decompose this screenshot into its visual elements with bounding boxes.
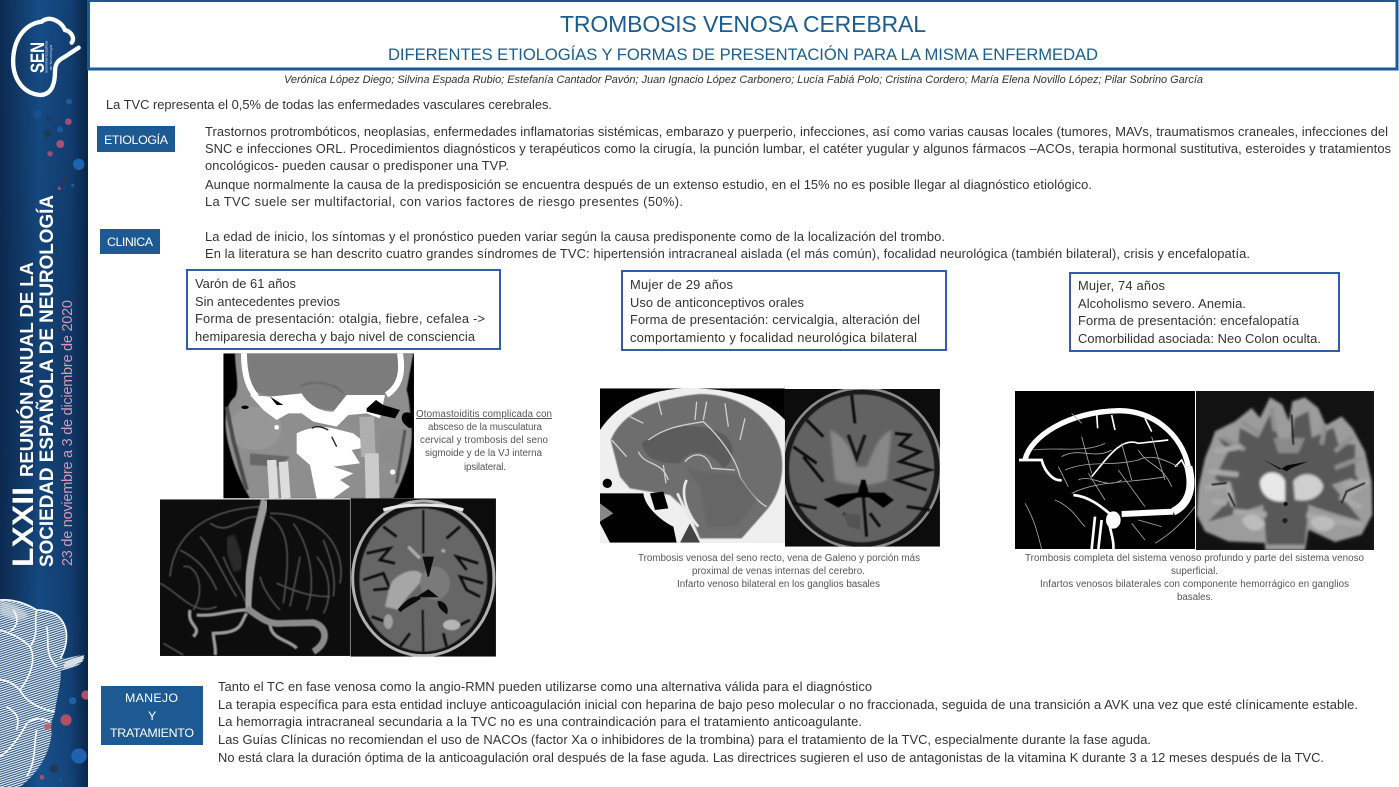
caption: case 3: superficial.	[1171, 566, 1218, 577]
case box 3: Alcoholismo severo. Anemia.	[1078, 296, 1246, 311]
authors: Verónica López Diego; Silvina Espada Rubio; Estefanía Cantador Pavón; Juan Ignacio López Carbonero; Lucía Fabiá Polo; Cristina Cordero; María Elena Novillo López; Pilar Sobrino García	[284, 74, 1203, 86]
caption: case 1	[416, 409, 552, 473]
case box 2: Forma de presentación: cervicalgia, alteración del	[630, 312, 920, 327]
caption: case 1: cervical y trombosis del seno	[420, 435, 549, 446]
text: manejo y tratamiento: La hemorragia intracraneal secundaria a la TVC no es una contraindicación para el tratamiento anticoagulante.	[218, 714, 862, 729]
image: coronal FLAIR, case 3	[1196, 391, 1374, 550]
case box 1: Varón de 61 años	[195, 276, 296, 291]
case box 3: Comorbilidad asociada: Neo Colon oculta.	[1078, 331, 1321, 346]
caption: case 3	[1025, 553, 1365, 603]
case box 1: Sin antecedentes previos	[195, 294, 340, 309]
text: clínica: En la literatura se han descrito cuatro grandes síndromes de TVC: hipertensión intracraneal aislada (el más común), focalidad neurológica (también bilateral), crisis y encefalopatía.	[205, 246, 1250, 261]
case box 3: Mujer, 74 años	[1078, 278, 1165, 293]
caption: case 2: Infarto venoso bilateral en los ganglios basales	[677, 579, 880, 590]
caption: case 3: Infartos venosos bilaterales con componente hemorrágico en ganglios	[1040, 579, 1349, 590]
caption: case 2: proximal de venas internas del cerebro.	[692, 566, 865, 577]
text: manejo y tratamiento: La terapia específica para esta entidad incluye anticoagulación inicial con heparina de bajo peso molecular o no fraccionada, seguida de una transición a AVK una vez que esté clínicamente estable.	[218, 697, 1358, 712]
label: clínica	[100, 229, 160, 254]
image: axial FLAIR, case 1	[350, 498, 496, 657]
case box 2: Uso de anticonceptivos orales	[630, 295, 804, 310]
decorative network dots, top	[33, 99, 84, 190]
caption: case 1: ipsilateral.	[464, 462, 506, 473]
label: manejo y tratamiento	[101, 686, 203, 745]
caption: case 1: sigmoide y de la VJ interna	[425, 448, 543, 459]
logo: SEN: Sociedad Española	[44, 41, 48, 73]
text: manejo y tratamiento: Las Guías Clínicas no recomiendan el uso de NACOs (factor Xa o inhibidores de la trombina) para el tratamiento de la TVC, especialmente durante la fase aguda.	[218, 732, 1151, 747]
label: etiología: ETIOLOGÍA	[104, 132, 169, 147]
caption: case 1: Otomastoiditis complicada con	[416, 409, 552, 420]
text: clínica	[205, 229, 1250, 261]
case box 2	[622, 271, 946, 350]
case box 1: hemiparesia derecha y bajo nivel de consciencia	[195, 329, 476, 344]
text: etiología: Aunque normalmente la causa de la predisposición se encuentra después de un extenso estudio, en el 15% no es posible llegar al diagnóstico etiológico.	[205, 177, 1092, 192]
label: manejo y tratamiento: TRATAMIENTO	[110, 726, 194, 740]
text: etiología: La TVC suele ser multifactorial, con varios factores de riesgo presentes (50%).	[205, 194, 683, 209]
label: clínica: CLINICA	[107, 235, 154, 249]
text: etiología: SNC e infecciones ORL. Procedimientos diagnósticos y terapéuticos como la cirugía, la punción lumbar, el catéter yugular y algunos fármacos –ACOs, terapia hormonal sustitutiva, esteroides y tratamientos	[205, 141, 1391, 156]
text: etiología	[205, 124, 1391, 209]
case box 1: Forma de presentación: otalgia, fiebre, cefalea ->	[195, 311, 485, 326]
congress name: LXXII	[7, 487, 40, 567]
text: manejo y tratamiento	[218, 679, 1358, 765]
text: manejo y tratamiento: No está clara la duración óptima de la anticoagulación oral después de la fase aguda. Las directrices sugieren el uso de antagonistas de la vitamina K durante 3 a 12 meses después de la TVC.	[218, 750, 1324, 765]
logo: SEN	[13, 19, 79, 95]
brain illustration	[0, 600, 91, 787]
label: etiología	[97, 126, 175, 152]
caption: case 3: basales.	[1177, 592, 1213, 603]
sidebar	[0, 0, 91, 787]
logo: SEN: de Neurología	[49, 45, 53, 70]
text: manejo y tratamiento: Tanto el TC en fase venosa como la angio-RMN pueden utilizarse como una alternativa válida para el diagnóstico	[218, 679, 872, 694]
congress name: 23 de noviembre a 3 de diciembre de 2020	[60, 300, 76, 566]
logo: SEN: SEN	[28, 42, 49, 73]
case box 1	[187, 270, 500, 349]
image: coronal CT, case 1	[223, 353, 414, 498]
caption: case 3: Trombosis completa del sistema venoso profundo y parte del sistema venoso	[1025, 553, 1365, 564]
case box 3: Forma de presentación: encefalopatía	[1078, 313, 1300, 328]
image: MR venography, case 1	[160, 499, 350, 656]
case box 3	[1070, 273, 1339, 351]
image: axial FLAIR, case 2	[782, 388, 941, 548]
text: clínica: La edad de inicio, los síntomas y el pronóstico pueden variar según la causa predisponente como de la localización del trombo.	[205, 229, 945, 244]
caption: case 1: absceso de la musculatura	[428, 422, 543, 433]
subtitle: DIFERENTES ETIOLOGÍAS Y FORMAS DE PRESENTACIÓN PARA LA MISMA ENFERMEDAD	[388, 45, 1098, 64]
label: manejo y tratamiento: Y	[148, 709, 156, 723]
case box 2: Mujer de 29 años	[630, 277, 733, 292]
title: TROMBOSIS VENOSA CEREBRAL	[560, 11, 926, 37]
label: manejo y tratamiento: MANEJO	[125, 691, 178, 705]
congress name: REUNIÓN ANUAL DE LA	[16, 262, 37, 477]
title panel	[88, 0, 1397, 69]
case box 2: comportamiento y focalidad neurológica bilateral	[630, 330, 917, 345]
caption: case 2: Trombosis venosa del seno recto, vena de Galeno y porción más	[638, 553, 920, 564]
intro sentence: La TVC representa el 0,5% de todas las enfermedades vasculares cerebrales.	[106, 97, 552, 112]
congress name: SOCIEDAD ESPAÑOLA DE NEUROLOGÍA	[36, 195, 58, 567]
text: etiología: Trastornos protrombóticos, neoplasias, enfermedades inflamatorias sistémicas, embarazo y puerperio, infecciones, así como varias causas locales (tumores, MAVs, traumatismos craneales, infecciones del	[205, 124, 1388, 139]
congress name	[12, 196, 72, 566]
text: etiología: oncológicos- pueden causar o predisponer una TVP.	[205, 158, 509, 173]
caption: case 2	[638, 553, 920, 590]
image: MR venography, case 3	[1015, 391, 1195, 549]
image: sagittal CT venography, case 2	[600, 388, 785, 543]
